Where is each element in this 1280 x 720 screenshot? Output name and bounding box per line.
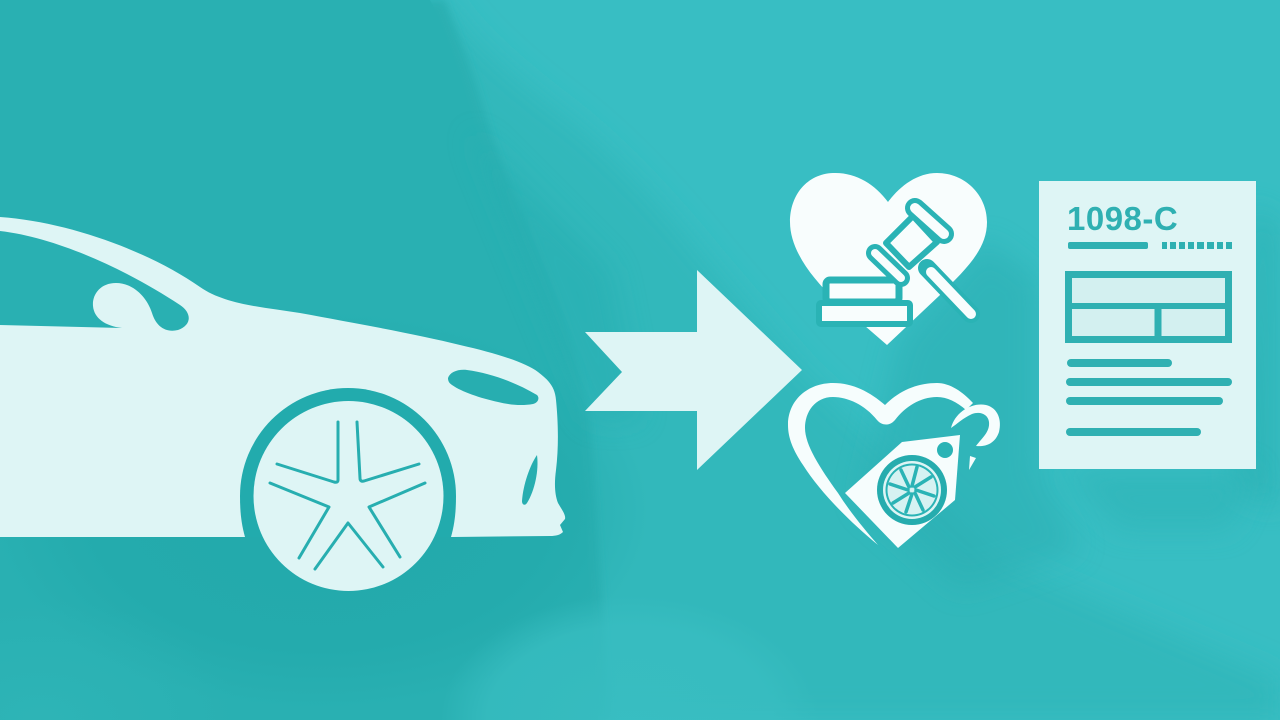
key ring	[951, 404, 1000, 446]
subtitle bar	[1068, 242, 1148, 249]
tag hole	[937, 442, 953, 458]
heart	[790, 173, 987, 345]
document: form 1098-C	[1039, 181, 1256, 469]
paper	[1039, 181, 1256, 469]
car body	[0, 217, 565, 537]
tag wheel	[877, 455, 947, 525]
form title: 1098-C	[1067, 200, 1178, 237]
heart outline	[788, 383, 973, 545]
wheel	[254, 401, 444, 591]
wheel arch	[240, 388, 456, 537]
tag clasp	[969, 456, 976, 470]
gavel head	[875, 208, 944, 278]
price tag	[845, 435, 960, 548]
form table	[1068, 274, 1229, 340]
car illustration	[0, 217, 565, 591]
wheel spokes	[270, 422, 425, 569]
icon: heart with car-wheel tag	[788, 383, 1000, 548]
subtitle dots	[1162, 242, 1232, 249]
icon: heart with gavel	[790, 173, 987, 345]
headlight	[448, 370, 538, 405]
gavel handle	[927, 268, 971, 314]
arrow	[585, 270, 802, 470]
text lines	[1070, 363, 1228, 432]
front vent	[522, 455, 538, 505]
gavel base	[819, 280, 910, 324]
